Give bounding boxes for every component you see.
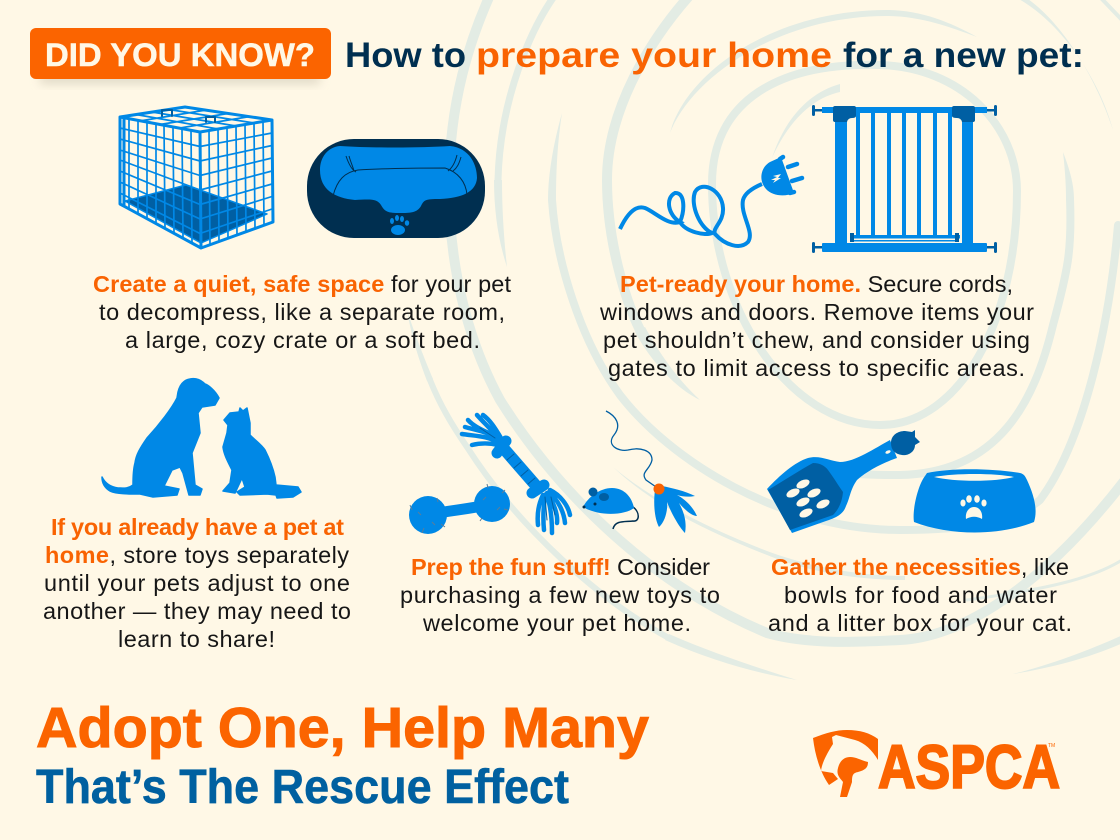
icon: feather wand toy — [606, 411, 697, 533]
text: pet-ready your home: gates to limit access to specific areas. — [608, 355, 1025, 381]
text: pet-ready your home: Pet-ready your home. Secure cords, — [620, 271, 1013, 297]
text: create a quiet space: to decompress, like a separate room, — [99, 299, 505, 325]
icon: spiked dumbbell toy — [409, 484, 510, 534]
icon: electric cord and plug — [620, 157, 802, 246]
text: pet-ready your home: windows and doors. Remove items your — [599, 299, 1034, 325]
text: gather the necessities: Gather the necessities, like — [771, 554, 1069, 580]
dog silhouette — [102, 379, 219, 497]
text: prep the fun stuff: welcome your pet home. — [422, 610, 691, 636]
icon: pet bed — [307, 139, 485, 238]
icon: litter scoop — [767, 430, 920, 533]
text: already have a pet — [43, 514, 351, 652]
text: already have a pet: home, store toys separately — [45, 542, 349, 568]
icon: food bowl — [914, 469, 1036, 532]
badge: did you know: DID YOU KNOW? — [45, 37, 315, 73]
cat silhouette — [223, 408, 301, 498]
text: prep the fun stuff: Prep the fun stuff! Consider — [411, 554, 710, 580]
text: pet-ready your home: pet shouldn’t chew, and consider using — [603, 327, 1030, 353]
text: already have a pet: another — they may need to — [43, 598, 351, 624]
text: already have a pet: until your pets adjust to one — [44, 570, 350, 596]
title: prepare your home — [476, 36, 832, 75]
text: create a quiet space — [93, 271, 511, 353]
icon: safety gate — [812, 105, 997, 253]
logo shield — [813, 730, 878, 797]
logo: aspca: TM — [1048, 743, 1055, 749]
subheading: the rescue effect: That’s The Rescue Effect — [36, 761, 569, 814]
badge: did you know — [30, 28, 331, 84]
icon: wire crate — [120, 107, 273, 248]
icon: dog and cat silhouettes — [102, 379, 301, 498]
title: for a new pet: — [843, 36, 1084, 75]
heading: adopt one, help many: Adopt One, Help Many — [36, 696, 649, 760]
icon: toy mouse — [582, 488, 638, 529]
text: create a quiet space: a large, cozy crate or a soft bed. — [125, 327, 480, 353]
title: How to — [345, 36, 466, 75]
text: gather the necessities: bowls for food and water — [784, 582, 1057, 608]
text: gather the necessities: and a litter box for your cat. — [768, 610, 1072, 636]
text: create a quiet space: Create a quiet, safe space for your pet — [93, 271, 511, 297]
text: prep the fun stuff — [400, 554, 720, 636]
text: prep the fun stuff: purchasing a few new toys to — [400, 582, 720, 608]
icon: rope toy — [462, 415, 570, 533]
text: gather the necessities — [768, 554, 1072, 636]
text: already have a pet: If you already have a pet at — [51, 514, 344, 540]
text: already have a pet: learn to share! — [118, 626, 275, 652]
logo: aspca — [813, 730, 1060, 801]
title — [345, 36, 1084, 75]
logo: aspca: ASPCA — [878, 733, 1060, 801]
text: pet-ready your home — [599, 271, 1034, 381]
